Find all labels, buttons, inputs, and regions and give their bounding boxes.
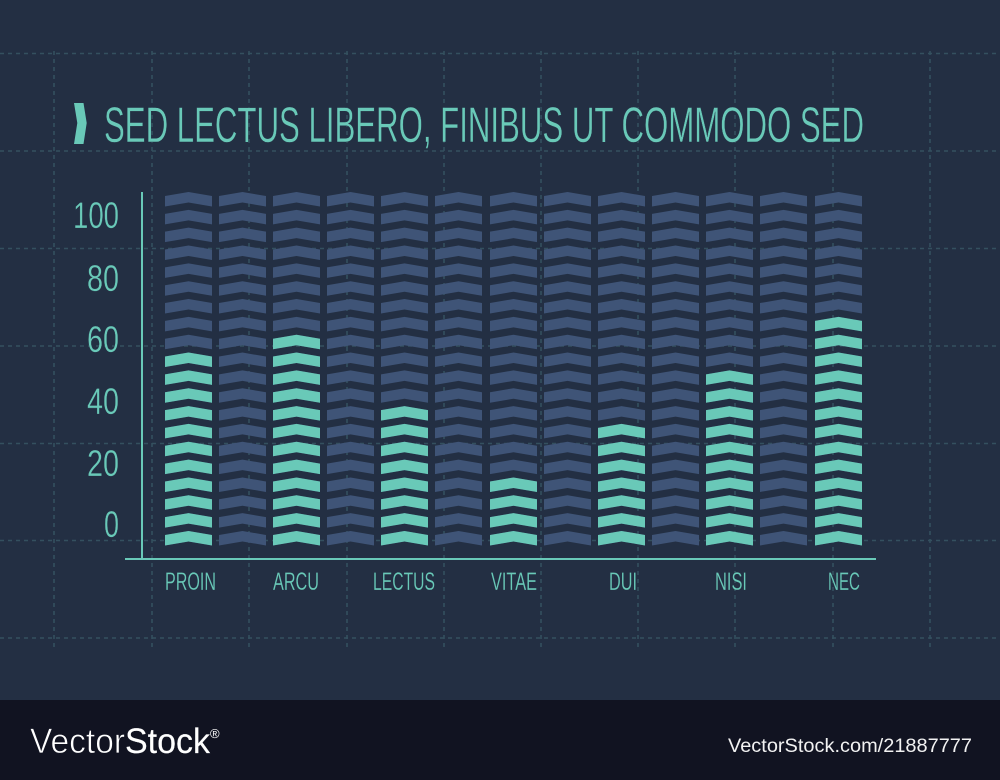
bar: NISI (706, 370, 753, 546)
x axis labels: VITAE (491, 568, 537, 596)
background chevron columns (165, 192, 862, 545)
x axis labels (165, 568, 860, 596)
y axis labels: 20 (87, 443, 119, 484)
title (74, 97, 864, 153)
bar: VITAE (490, 478, 537, 546)
dashed background grid (0, 51, 1000, 650)
footer logo: VectorStock: Stock (125, 722, 210, 761)
x axis labels: DUI (609, 568, 637, 596)
icon: title chevron (74, 103, 87, 144)
x axis labels: PROIN (165, 568, 216, 596)
y axis labels: 40 (87, 381, 119, 422)
footer bar (0, 700, 1000, 780)
bar: ARCU (273, 334, 320, 546)
y axis labels: 60 (87, 319, 119, 360)
bar: NEC (815, 316, 862, 546)
bar: LECTUS (381, 406, 428, 546)
footer logo: VectorStock: Vector (30, 722, 125, 761)
bar: DUI (598, 424, 645, 546)
footer logo: VectorStock: ® (210, 726, 220, 741)
footer logo: VectorStock (30, 722, 220, 761)
y axis labels: 100 (73, 195, 119, 236)
y axis labels: 0 (104, 504, 119, 545)
x axis labels: NISI (715, 568, 747, 596)
x axis labels: ARCU (273, 568, 319, 596)
x axis labels: NEC (828, 568, 860, 596)
chart: chevron columns (165, 192, 862, 545)
x axis labels: LECTUS (373, 568, 435, 596)
bar: PROIN (165, 352, 212, 546)
y axis labels (73, 195, 119, 545)
y axis labels: 80 (87, 258, 119, 299)
axes (125, 192, 876, 559)
footer url: VectorStock.com/21887777 (728, 736, 972, 757)
